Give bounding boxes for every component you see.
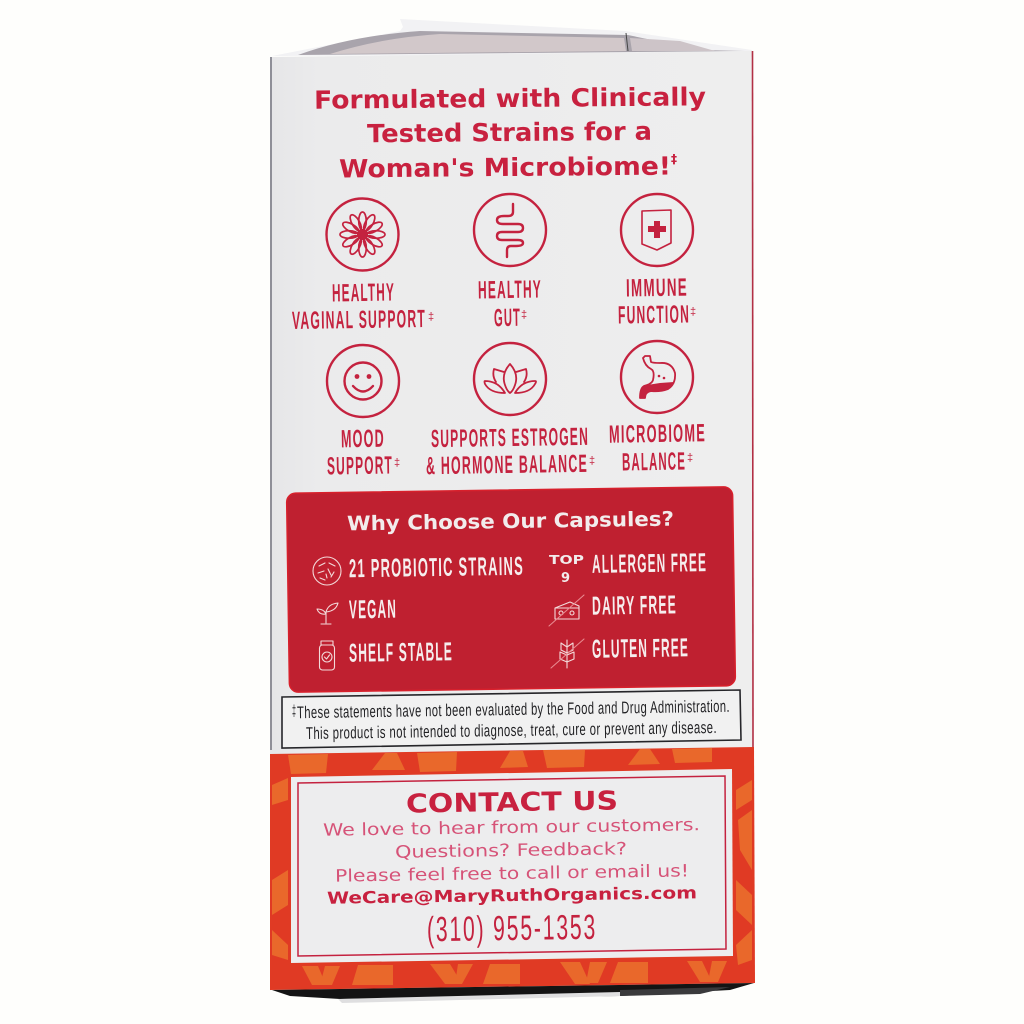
panel: why choose our capsules: VEGAN xyxy=(349,594,397,624)
heading: Tested Strains for a xyxy=(367,117,652,148)
item: gluten free xyxy=(551,632,689,668)
item: dairy free xyxy=(549,589,677,626)
disclaimer box: This product is not intended to diagnose, treat, cure or prevent any disease. xyxy=(306,718,717,743)
label: immune function: FUNCTION xyxy=(618,300,690,330)
orange patterned band xyxy=(270,747,755,990)
item: vegan xyxy=(317,594,397,624)
contact message xyxy=(323,815,700,887)
panel heading: Why Choose Our Capsules? xyxy=(347,507,674,535)
item: 21 probiotic strains xyxy=(313,551,524,585)
box white front panel xyxy=(270,51,754,755)
white card with border xyxy=(291,769,733,963)
label: supports estrogen and hormone balance: SUPPORTS ESTROGEN xyxy=(431,423,589,453)
label: healthy gut: ‡ xyxy=(521,309,527,321)
label: supports estrogen and hormone balance xyxy=(426,423,595,480)
label: supports estrogen and hormone balance: ‡ xyxy=(589,455,595,467)
heading xyxy=(314,82,706,183)
box bottom shadow and flap xyxy=(272,983,754,1003)
panel: why choose our capsules: 21 PROBIOTIC STRAINS xyxy=(349,551,524,583)
panel: why choose our capsules xyxy=(287,487,735,692)
text: HEALTHY xyxy=(478,276,542,304)
panel: why choose our capsules: DAIRY FREE xyxy=(592,589,677,621)
panel: contact us xyxy=(291,769,733,963)
contact phone: (310) 955-1353 xyxy=(427,908,597,949)
label: immune function: ‡ xyxy=(690,306,696,318)
label: immune function: IMMUNE xyxy=(626,274,688,302)
label: mood support: SUPPORT xyxy=(327,452,393,480)
label: healthy vaginal support: HEALTHY xyxy=(332,279,395,307)
label: microbiome balance xyxy=(609,419,706,476)
label: healthy gut: GUT xyxy=(494,304,521,332)
item: shelf stable xyxy=(320,636,453,670)
label: healthy gut xyxy=(478,276,542,332)
contact email: WeCare@MaryRuthOrganics.com xyxy=(327,883,697,908)
red panel background xyxy=(287,487,735,692)
contact message: We love to hear from our customers. xyxy=(323,815,700,841)
icon: stomach xyxy=(621,341,693,413)
panel: why choose our capsules: GLUTEN FREE xyxy=(592,632,689,664)
item: top 9 allergen free xyxy=(549,547,707,586)
panel: why choose our capsules: SHELF STABLE xyxy=(349,636,453,668)
item: top 9 allergen free: TOP xyxy=(549,552,584,567)
label: immune function xyxy=(618,274,696,330)
label: healthy vaginal support: VAGINAL SUPPORT xyxy=(292,305,426,335)
item: top 9 allergen free: 9 xyxy=(561,571,570,586)
box left and right edges xyxy=(271,51,753,750)
icon: lotus xyxy=(474,343,546,415)
label: microbiome balance: ‡ xyxy=(687,452,693,464)
label: microbiome balance: BALANCE xyxy=(622,448,686,476)
label: supports estrogen and hormone balance: & HORMONE BALANCE xyxy=(426,450,588,480)
disclaimer box xyxy=(282,690,741,748)
label: healthy vaginal support xyxy=(292,279,434,335)
label: mood support: MOOD xyxy=(341,425,385,453)
disclaimer box: ‡ xyxy=(292,703,296,720)
disclaimer box: These statements have not been evaluated by the Food and Drug Administration. xyxy=(297,697,730,722)
contact heading: CONTACT US xyxy=(406,786,618,820)
heading: Woman's Microbiome! xyxy=(339,152,671,183)
panel: why choose our capsules: ALLERGEN FREE xyxy=(592,547,707,579)
contact message: Questions? Feedback? xyxy=(395,839,627,863)
label: mood support: ‡ xyxy=(394,457,400,469)
icon: flower xyxy=(326,198,398,270)
label: mood support xyxy=(327,425,400,480)
heading: Formulated with Clinically xyxy=(314,82,706,115)
heading: ‡ xyxy=(671,152,677,166)
icon: smiley xyxy=(327,345,399,417)
contact message: Please feel free to call or email us! xyxy=(335,861,689,887)
icon: shield with cross xyxy=(621,194,693,266)
label: microbiome balance: MICROBIOME xyxy=(609,419,706,449)
label: healthy vaginal support: ‡ xyxy=(428,311,434,323)
box top flap xyxy=(272,19,752,56)
icon: intestine xyxy=(474,194,546,266)
